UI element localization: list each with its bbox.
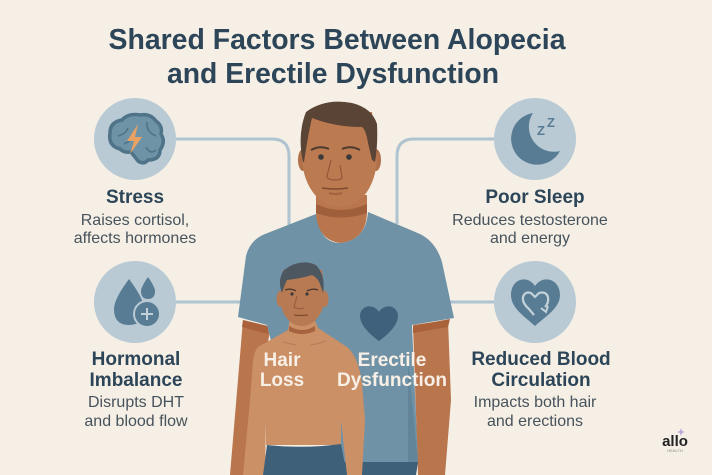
connector: poor sleep to figure — [397, 139, 494, 224]
large figure T-shirt — [238, 212, 454, 462]
poor sleep description: and energy — [490, 230, 570, 247]
large figure hair — [301, 102, 377, 162]
figure label: hair loss: Loss — [260, 370, 304, 391]
title — [108, 24, 566, 90]
stress description: affects hormones — [74, 230, 196, 247]
poor sleep description — [452, 212, 608, 247]
panel: hormonal imbalance — [84, 261, 188, 430]
panel: reduced blood circulation — [471, 261, 611, 430]
small figure neck shadow — [289, 326, 315, 334]
poor sleep description: Reduces testosterone — [452, 212, 608, 229]
small figure hair — [280, 262, 324, 293]
icon: crescent moon with z letters: Z — [537, 123, 545, 138]
reduced blood circulation heading — [471, 349, 611, 391]
icon: hormone droplets with plus — [94, 261, 176, 343]
T-shirt fold shading — [408, 360, 418, 462]
icon: heart with circulation arrow — [494, 261, 576, 343]
hormonal imbalance heading — [90, 349, 182, 391]
small figure facial features — [285, 289, 318, 316]
large male figure — [230, 102, 454, 475]
small male figure — [243, 262, 365, 475]
large figure arms — [230, 319, 451, 475]
hormonal imbalance description: Disrupts DHT — [88, 394, 184, 411]
large figure neck — [316, 195, 367, 243]
large figure facial features — [311, 147, 360, 194]
figure label: hair loss: Hair — [264, 350, 301, 371]
figure label: erectile dysfunction: Dysfunction — [337, 370, 447, 391]
stress heading: Stress — [106, 187, 164, 208]
large figure shorts — [340, 462, 418, 475]
panel: stress — [74, 98, 196, 247]
poor sleep heading: Poor Sleep — [485, 187, 585, 208]
connector: blood circulation to figure — [450, 300, 494, 304]
large figure face — [302, 112, 377, 207]
logo: allo health — [662, 428, 688, 453]
title: Shared Factors Between Alopecia — [108, 24, 566, 56]
reduced blood circulation heading: Reduced Blood — [471, 349, 611, 370]
icon: crescent moon with z letters — [494, 98, 576, 180]
small figure head — [280, 270, 325, 326]
small figure shorts — [263, 444, 347, 475]
connector: hormonal imbalance to figure — [176, 300, 242, 304]
reduced blood circulation heading: Circulation — [491, 370, 591, 391]
hormonal imbalance description: and blood flow — [84, 413, 188, 430]
stress description: Raises cortisol, — [81, 212, 189, 229]
icon: heart on shirt — [360, 306, 398, 341]
icon: brain with lightning bolt — [94, 98, 176, 180]
reduced blood circulation description: and erections — [487, 413, 583, 430]
figure label: hair loss — [260, 350, 304, 391]
large figure ears — [298, 149, 381, 171]
title: and Erectile Dysfunction — [167, 58, 499, 90]
figure label: erectile dysfunction — [337, 350, 447, 391]
reduced blood circulation description: Impacts both hair — [474, 394, 597, 411]
panel: poor sleep — [452, 98, 608, 247]
logo: allo health: HEALTH — [667, 448, 683, 453]
hormonal imbalance heading: Imbalance — [90, 370, 182, 391]
logo: allo health: allo — [662, 433, 688, 450]
stress description — [74, 212, 196, 247]
icon: crescent moon with z letters: Z — [547, 115, 555, 130]
figure label: erectile dysfunction: Erectile — [358, 350, 426, 371]
hormonal imbalance description — [84, 394, 188, 430]
small figure chest detail — [283, 341, 326, 345]
hormonal imbalance heading: Hormonal — [92, 349, 180, 370]
reduced blood circulation description — [474, 394, 597, 430]
small figure body — [243, 318, 365, 475]
connector: stress to figure — [176, 139, 289, 226]
